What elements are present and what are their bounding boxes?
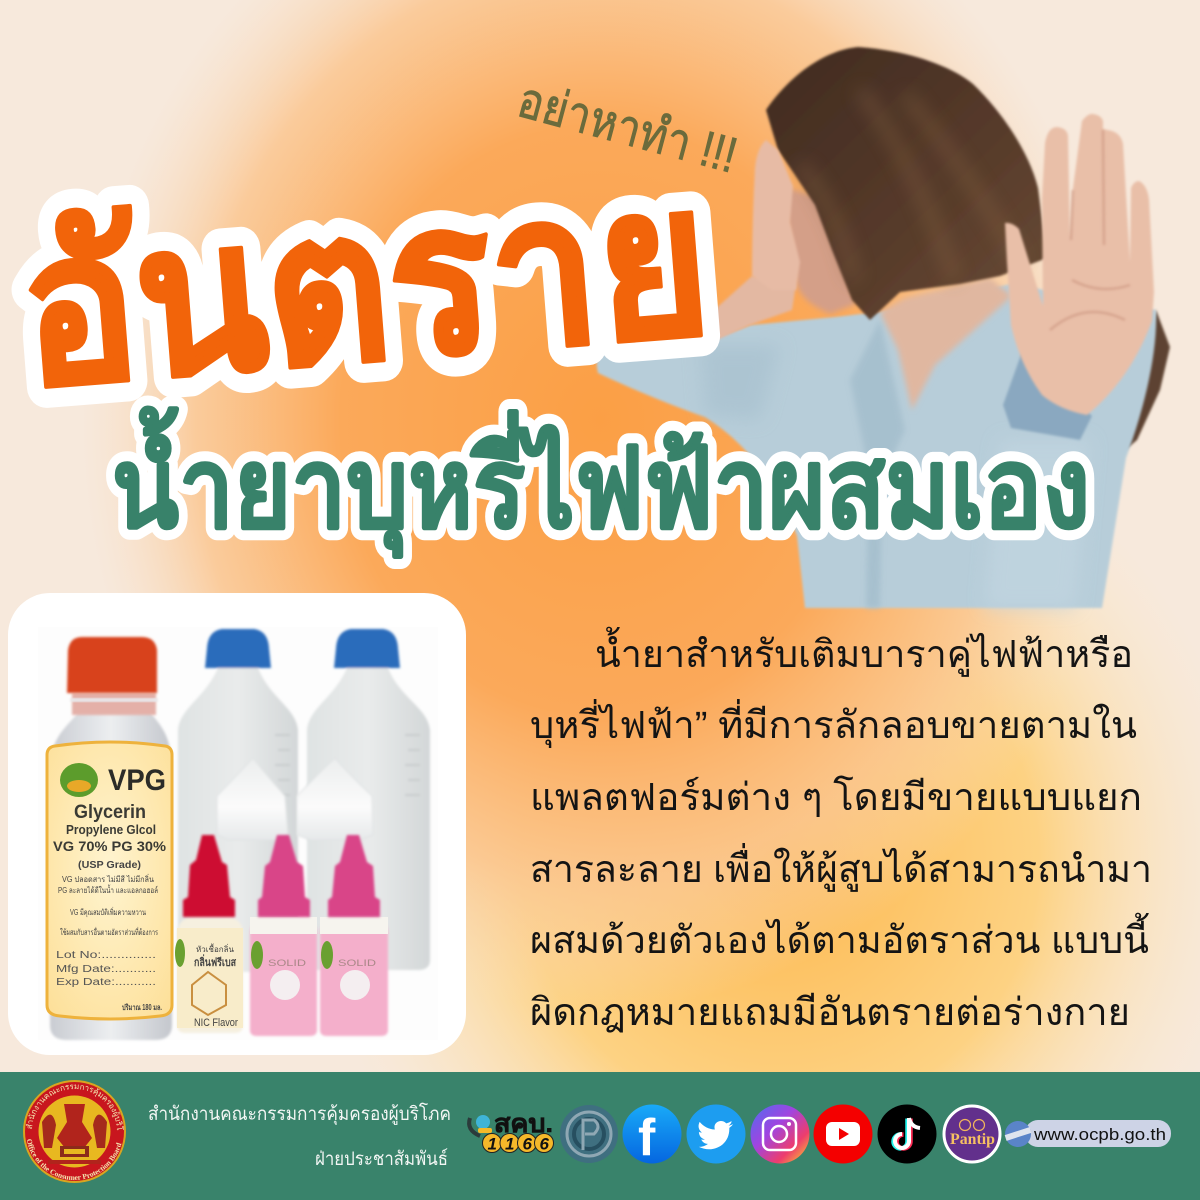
shirt <box>597 284 1156 608</box>
body text: สารละลาย เพื่อให้ผู้สูบได้สามารถนำมา <box>530 843 1152 892</box>
forearm <box>708 276 796 344</box>
bottle label: (USP Grade) <box>78 860 141 871</box>
footer text <box>148 1102 451 1170</box>
red dropper bottle: NIC Flavor <box>194 1017 238 1029</box>
hair <box>766 47 1047 320</box>
icon: OCPB seal <box>23 1080 126 1183</box>
bottle label: ปริมาณ 180 มล. <box>122 1003 162 1012</box>
red dropper bottle: หัวเชื้อกลิ่น <box>196 943 235 954</box>
icon: P logo <box>560 1105 618 1163</box>
red dropper bottle <box>175 835 243 1033</box>
body text: ผิดกฎหมายแถมมีอันตรายต่อร่างกาย <box>530 992 1130 1034</box>
VPG bottle <box>47 637 172 1040</box>
main title: danger: อันตราย <box>13 142 717 430</box>
subtitle: น้ำยาบุหรี่ไฟฟ้าผสมเอง <box>112 406 1090 559</box>
main title: danger: อันตราย <box>13 142 717 430</box>
icon: Pantip: Pantip <box>950 1131 995 1148</box>
pink dropper bottle one: SOLID <box>268 958 307 968</box>
bottle label: ใช้ผสมกับสารอื่นตามอัตราส่วนที่ต้องการ <box>60 926 158 937</box>
icon: OCPB hotline 1166: 1 <box>488 1134 497 1154</box>
hand on head <box>752 140 800 290</box>
icon: OCPB hotline 1166 <box>469 1110 554 1154</box>
cuff <box>1003 352 1092 440</box>
body text: ผสมด้วยตัวเองได้ตามอัตราส่วน แบบนี้ <box>530 912 1150 962</box>
bottle label <box>47 742 172 1019</box>
website pill: www.ocpb.go.th <box>1033 1126 1166 1144</box>
small heading: don't do it: อย่าหาทำ !!! <box>512 72 743 184</box>
red dropper bottle: กลิ่นฟรีเบส <box>194 954 236 969</box>
bottle label: Exp Date:........... <box>56 977 156 988</box>
footer text: สำนักงานคณะกรรมการคุ้มครองผู้บริโภค <box>148 1102 451 1126</box>
icon: OCPB hotline 1166: สคบ. <box>494 1110 553 1138</box>
pink dropper bottle two <box>320 835 388 1036</box>
icon: Pantip <box>944 1106 1000 1162</box>
plastic bottle left <box>178 629 298 972</box>
icon: Facebook <box>622 1104 682 1167</box>
icon: OCPB seal: Office of the Consumer Protection Board <box>27 1139 122 1180</box>
body text <box>530 626 1152 1034</box>
icon: TikTok <box>878 1104 936 1164</box>
face <box>782 186 856 314</box>
raised hand <box>1005 114 1154 415</box>
bottle label: Lot No:.............. <box>56 950 156 961</box>
bottle label: Glycerin <box>74 802 146 823</box>
photo: woman making stop gesture <box>597 47 1170 608</box>
panel: product photo <box>8 593 466 1055</box>
icon: Instagram <box>750 1104 810 1164</box>
clear cap right <box>297 758 373 840</box>
pink dropper bottle two: SOLID <box>338 958 377 968</box>
footer band <box>0 1072 1200 1200</box>
bottle label: Propylene Glcol <box>66 822 156 837</box>
icon: Twitter <box>686 1104 746 1164</box>
icon: YouTube <box>814 1104 872 1164</box>
icon: OCPB hotline 1166: 6 <box>522 1134 532 1154</box>
body text: บุหรี่ไฟฟ้า” ที่มีการลักลอบขายตามใน <box>530 699 1137 748</box>
bottle label: VG ปลอดสาร ไม่มีสี ไม่มีกลิ่น <box>62 873 154 884</box>
body text: น้ำยาสำหรับเติมบาราคู่ไฟฟ้าหรือ <box>595 626 1133 677</box>
icon: Facebook: f <box>638 1109 656 1167</box>
bottle label: Mfg Date:........... <box>56 964 156 975</box>
body text: แพลตฟอร์มต่าง ๆ โดยมีขายแบบแยก <box>530 775 1142 819</box>
clear cap left <box>217 758 288 840</box>
neck and chest <box>880 278 1012 410</box>
footer text: ฝ่ายประชาสัมพันธ์ <box>315 1148 448 1170</box>
icon: OCPB hotline 1166: 1 <box>505 1134 514 1154</box>
bottle label: PG ละลายได้ดีในน้ำ และแอลกอฮอล์ <box>58 884 158 895</box>
subtitle: น้ำยาบุหรี่ไฟฟ้าผสมเอง <box>112 406 1090 559</box>
icon: OCPB hotline 1166: 6 <box>540 1134 550 1154</box>
plastic bottle right <box>307 629 430 970</box>
bottle label: VG 70% PG 30% <box>53 838 167 854</box>
pink dropper bottle one <box>250 835 317 1036</box>
bottle label: VG มีคุณสมบัติเพิ่มความหวาน <box>70 906 146 917</box>
website pill <box>1005 1120 1171 1147</box>
icon: OCPB seal: สำนักงานคณะกรรมการคุ้มครองผู้บริโภค <box>26 1084 124 1130</box>
bottle label: VPG <box>108 764 166 797</box>
